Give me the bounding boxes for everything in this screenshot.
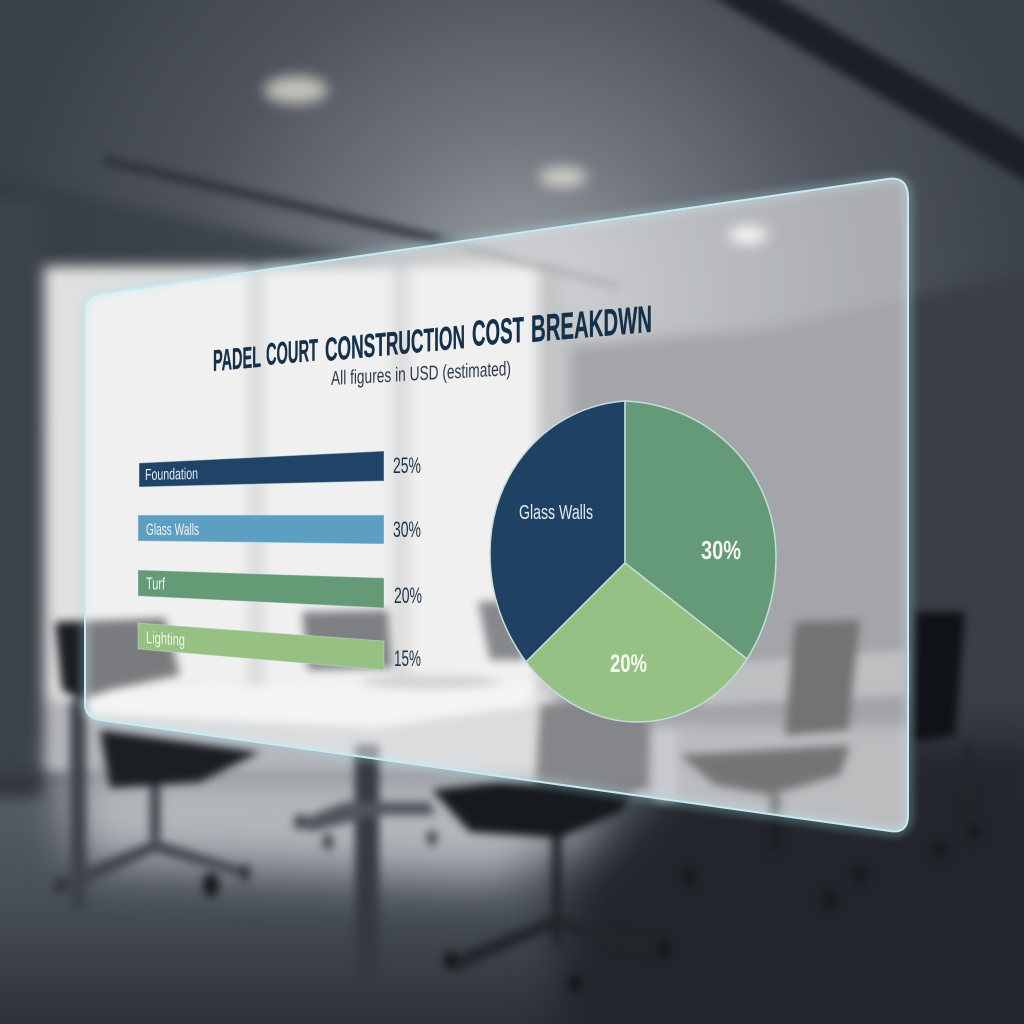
title: BREAKDWN bbox=[531, 299, 652, 351]
subtitle: All figures in USD (estimated) bbox=[331, 358, 511, 390]
floor bbox=[0, 778, 1024, 1024]
left dark wall bbox=[0, 200, 43, 800]
pie label: glass walls: Glass Walls bbox=[519, 502, 593, 524]
glass panel bbox=[85, 179, 908, 831]
ceiling slot lines bbox=[104, 160, 440, 240]
window header band bbox=[0, 170, 620, 420]
bar chart bbox=[138, 451, 422, 671]
bar: foundation: Foundation bbox=[145, 466, 198, 484]
right wall bbox=[570, 270, 1024, 790]
bar: glass walls: 30% bbox=[393, 517, 421, 542]
bar: foundation bbox=[139, 451, 421, 487]
window bbox=[44, 266, 554, 706]
far right chair bbox=[912, 612, 965, 742]
dark right floor bbox=[560, 740, 1024, 1024]
right chair bbox=[785, 620, 860, 735]
front chair bbox=[535, 695, 650, 792]
floor seen through panel bbox=[636, 721, 907, 830]
panel glow bbox=[85, 179, 908, 831]
title: COURT bbox=[266, 332, 318, 372]
bar: turf: Turf bbox=[146, 574, 165, 594]
title: COST bbox=[472, 309, 524, 354]
bar: lighting bbox=[138, 623, 421, 671]
panel pane bbox=[85, 179, 908, 831]
bar: lighting: Lighting bbox=[146, 628, 185, 650]
bar: lighting: 15% bbox=[394, 646, 421, 671]
pie label: 30%: 30% bbox=[701, 535, 741, 565]
bar: turf: 20% bbox=[394, 583, 422, 608]
slice: light green bbox=[526, 563, 747, 722]
left chair bbox=[55, 618, 180, 700]
middle chair bbox=[302, 610, 392, 670]
window reflection on floor bbox=[60, 760, 600, 880]
wall lightening inside panel bbox=[206, 180, 907, 778]
title: PADEL bbox=[213, 341, 261, 378]
title bbox=[213, 299, 652, 378]
pie chart bbox=[490, 401, 776, 722]
pie label: 20%: 20% bbox=[610, 650, 647, 678]
bar: foundation: 25% bbox=[393, 453, 421, 478]
table bbox=[60, 682, 530, 728]
bar: glass walls: Glass Walls bbox=[146, 520, 199, 539]
window mullions bbox=[250, 266, 262, 696]
bar: glass walls bbox=[138, 515, 421, 544]
bar: turf bbox=[138, 570, 422, 608]
ceiling lights bbox=[264, 76, 328, 104]
title: CONSTRUCTION bbox=[325, 319, 465, 369]
slice: navy bbox=[490, 401, 625, 662]
slice: mid green bbox=[625, 401, 776, 659]
